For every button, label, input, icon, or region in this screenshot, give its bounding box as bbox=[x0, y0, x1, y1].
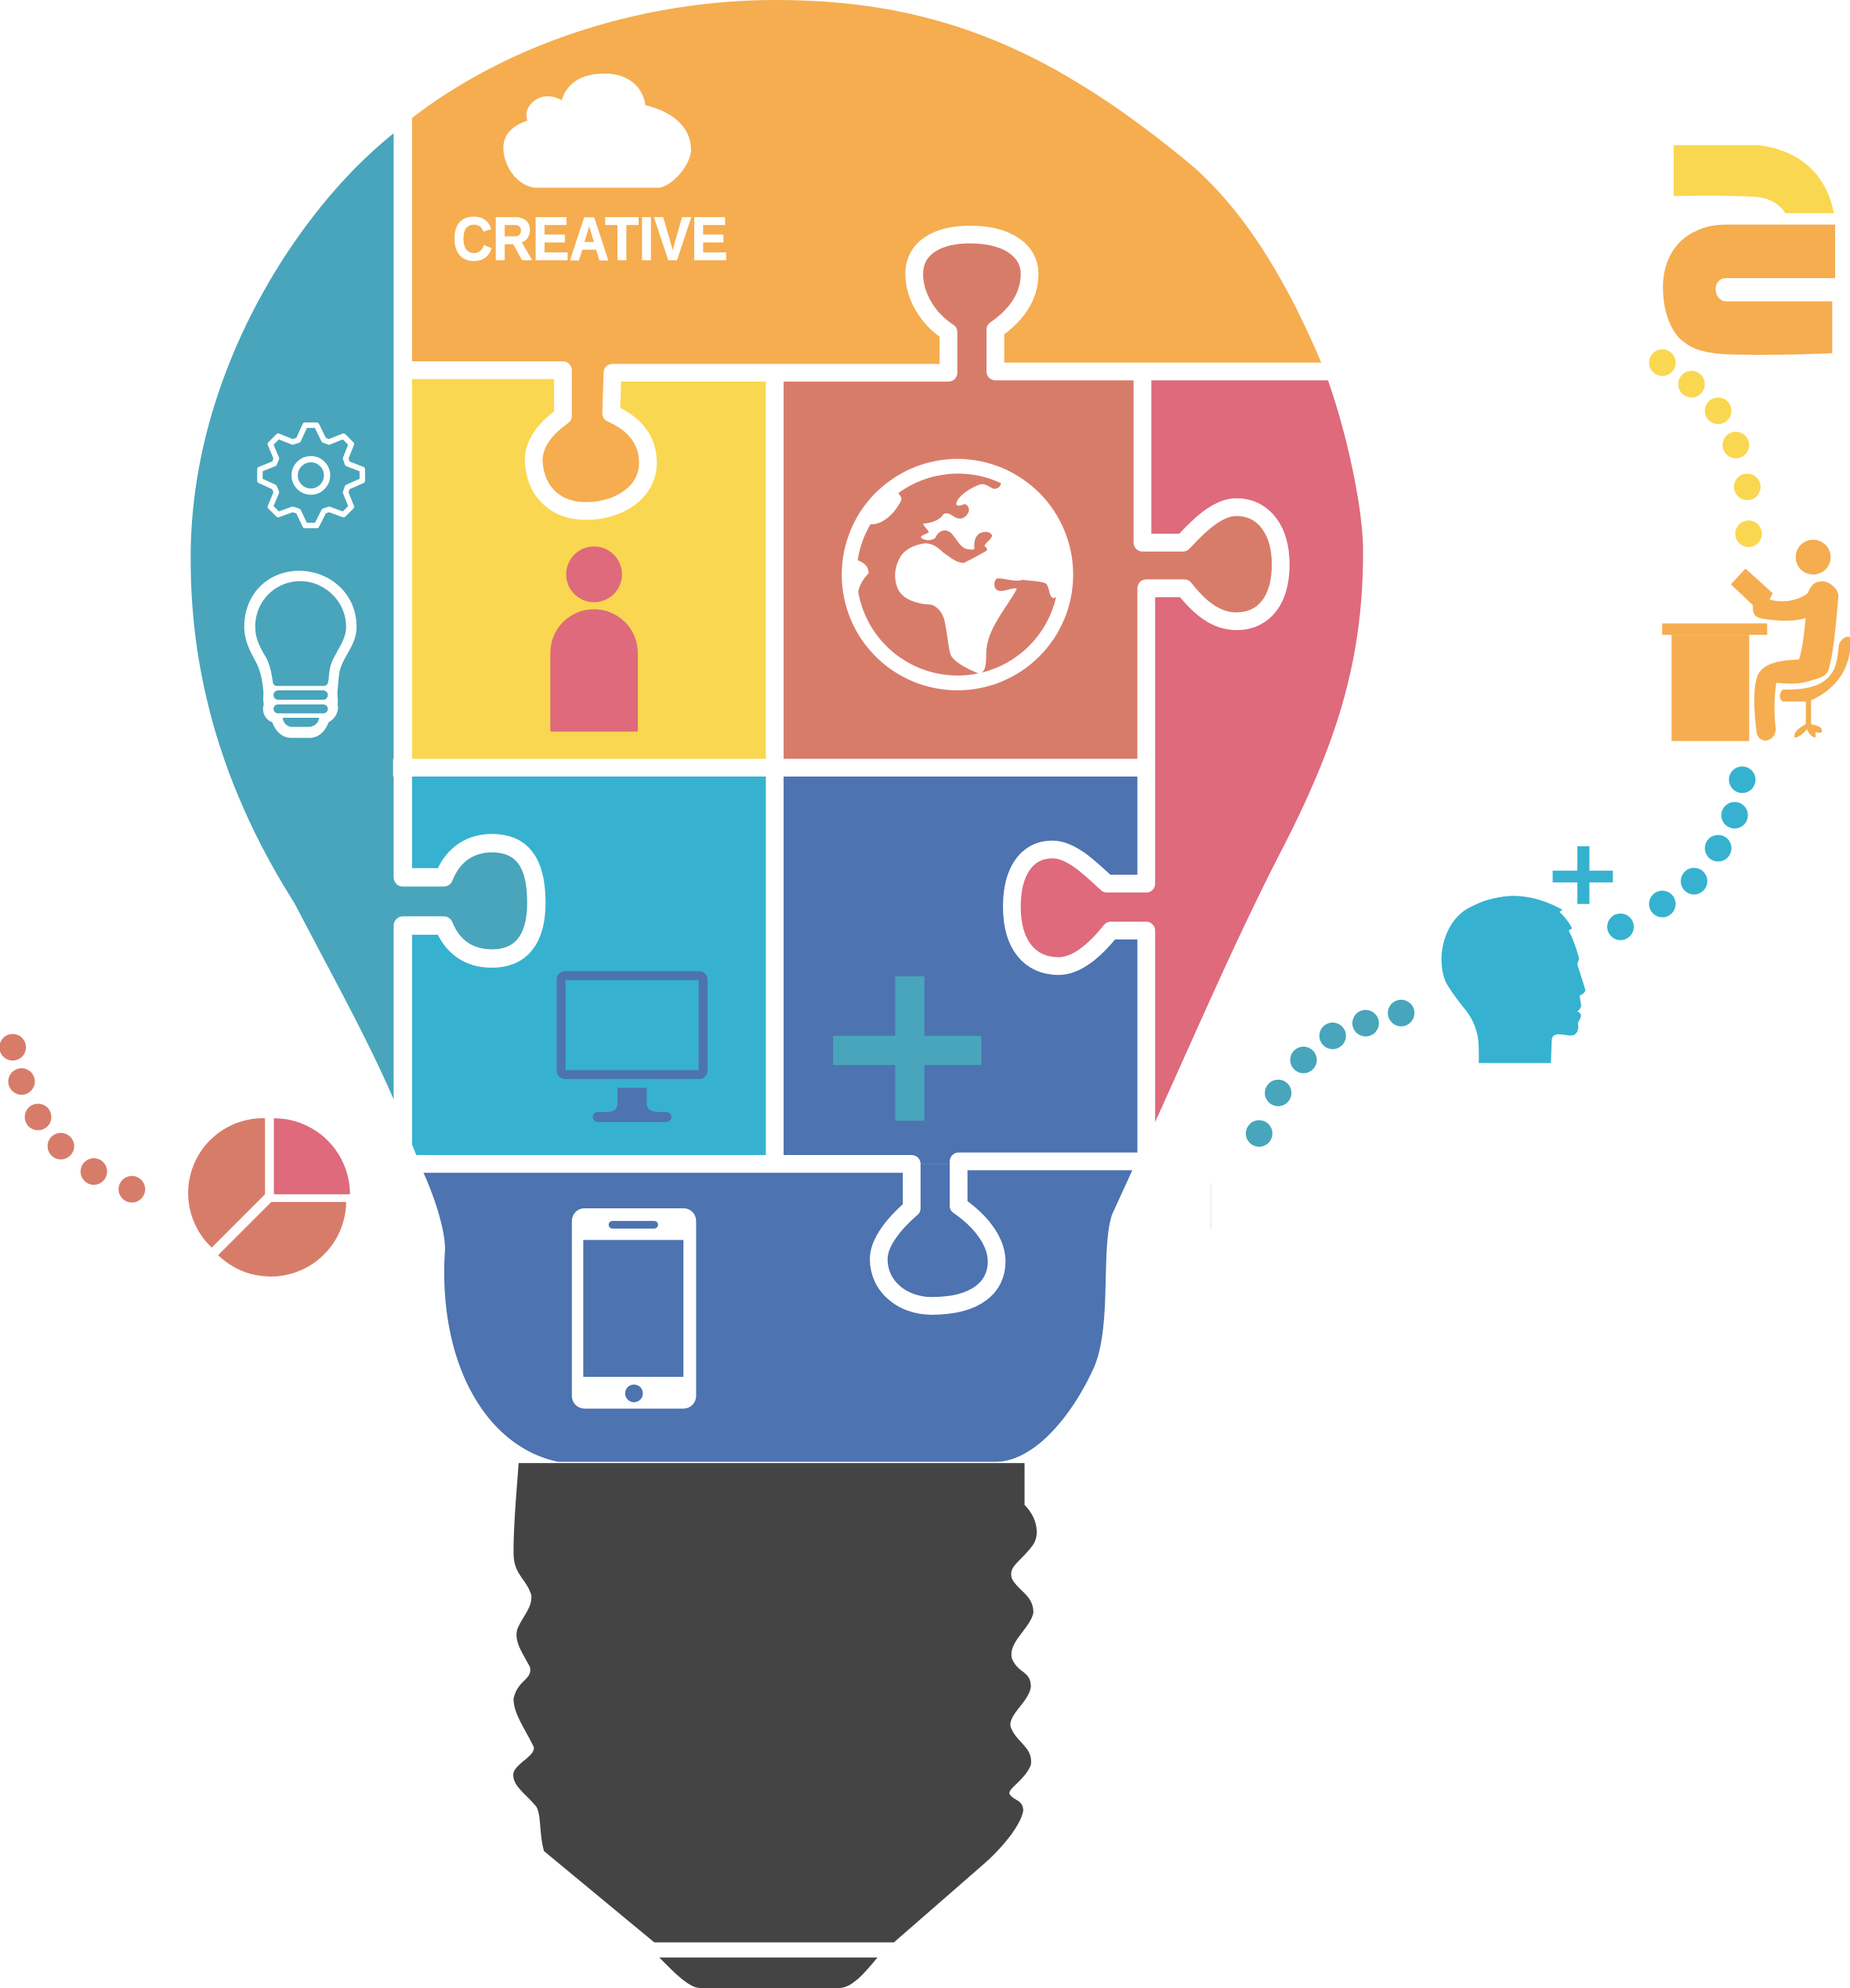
icon: person reading at desk bbox=[1662, 540, 1850, 741]
icon: abstract logo mark bbox=[1663, 145, 1835, 355]
icon: person bbox=[550, 546, 638, 732]
panel: blue bottom bbox=[406, 1164, 1167, 1468]
panel: pink right bbox=[1149, 380, 1363, 1122]
panel: salmon bbox=[775, 371, 1146, 767]
icon: pie chart bbox=[188, 1118, 350, 1276]
icon: plus in blue panel bbox=[833, 976, 982, 1121]
puzzle knob: salmon top bbox=[923, 243, 1021, 371]
panel: teal left bbox=[190, 133, 400, 1099]
dotted path: salmon bbox=[0, 1034, 145, 1203]
dotted path: cyan bbox=[1607, 766, 1755, 940]
puzzle knob: salmon right bbox=[1146, 516, 1272, 613]
icon: gear bbox=[260, 425, 362, 526]
icon: desktop monitor bbox=[561, 976, 703, 1122]
dotted path: yellow bbox=[1649, 349, 1762, 547]
puzzle knob: orange bbox=[542, 371, 639, 502]
dotted path: teal bbox=[1246, 1000, 1414, 1146]
icon: cloud bbox=[503, 74, 691, 187]
panel: cyan bbox=[402, 767, 775, 1164]
panel: orange top bbox=[402, 0, 1378, 371]
lamp base tip bbox=[659, 1957, 878, 1988]
light bulb glass bbox=[178, 0, 1383, 1468]
lamp screw base bbox=[513, 1463, 1037, 1943]
puzzle divider lines bbox=[393, 111, 1344, 1306]
panel: blue bbox=[775, 767, 1146, 1164]
puzzle knob: teal bbox=[402, 853, 527, 950]
icon: smartphone bbox=[572, 1208, 696, 1409]
icon: globe bbox=[842, 459, 1073, 690]
panel: yellow bbox=[402, 371, 775, 767]
icon: small plus bbox=[1553, 846, 1613, 904]
heading: CREATIVE: CREATIVE bbox=[453, 206, 728, 273]
icon: small light bulb bbox=[244, 570, 357, 738]
puzzle knob: pink bbox=[1020, 858, 1146, 958]
icon: human head profile bbox=[1442, 896, 1585, 1063]
